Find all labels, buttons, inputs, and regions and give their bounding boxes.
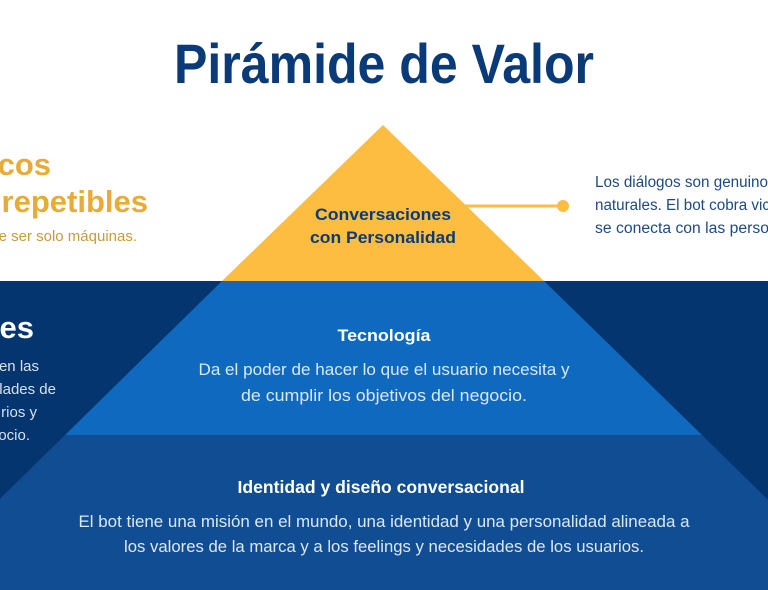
middle tier heading: Tecnología bbox=[338, 326, 431, 345]
left body text on navy: lades de bbox=[0, 381, 56, 398]
left body text on navy: en las bbox=[0, 358, 39, 375]
left heading: únicos e irrepetibles bbox=[0, 147, 148, 219]
pyramid top tier bbox=[222, 125, 544, 281]
left heading on navy: es bbox=[0, 310, 34, 345]
bottom tier body: El bot tiene una misión en el mundo, una identidad y una personalidad alineada a bbox=[78, 513, 690, 531]
right description text bbox=[595, 174, 768, 237]
right description text: naturales. El bot cobra vic bbox=[595, 197, 768, 214]
left body text on navy bbox=[0, 358, 56, 444]
bottom tier body bbox=[78, 513, 690, 556]
dark navy background band bbox=[0, 281, 768, 590]
right description text: se conecta con las perso bbox=[595, 220, 768, 237]
top tier label bbox=[310, 205, 456, 247]
top tier label: Conversaciones bbox=[315, 205, 451, 224]
right description text: Los diálogos son genuino bbox=[595, 174, 768, 191]
left heading: únicos e irrepetibles: repetibles bbox=[2, 184, 148, 219]
pyramid middle tier bbox=[65, 281, 702, 435]
top tier label: con Personalidad bbox=[310, 228, 456, 247]
left body text on navy: rios y bbox=[1, 404, 37, 421]
middle tier body: Da el poder de hacer lo que el usuario necesita y bbox=[198, 361, 570, 379]
pyramid bottom tier bbox=[0, 435, 768, 590]
left subtext: ser solo máquinas: e ser solo máquinas. bbox=[0, 228, 137, 245]
connector line with dot bbox=[465, 200, 569, 212]
bottom tier heading: Identidad y diseño conversacional bbox=[238, 477, 524, 497]
middle tier body: de cumplir los objetivos del negocio. bbox=[241, 387, 527, 405]
bottom tier body: los valores de la marca y a los feelings y necesidades de los usuarios. bbox=[124, 538, 644, 556]
title: Pirámide de Valor bbox=[174, 32, 594, 95]
middle tier body bbox=[198, 361, 570, 405]
